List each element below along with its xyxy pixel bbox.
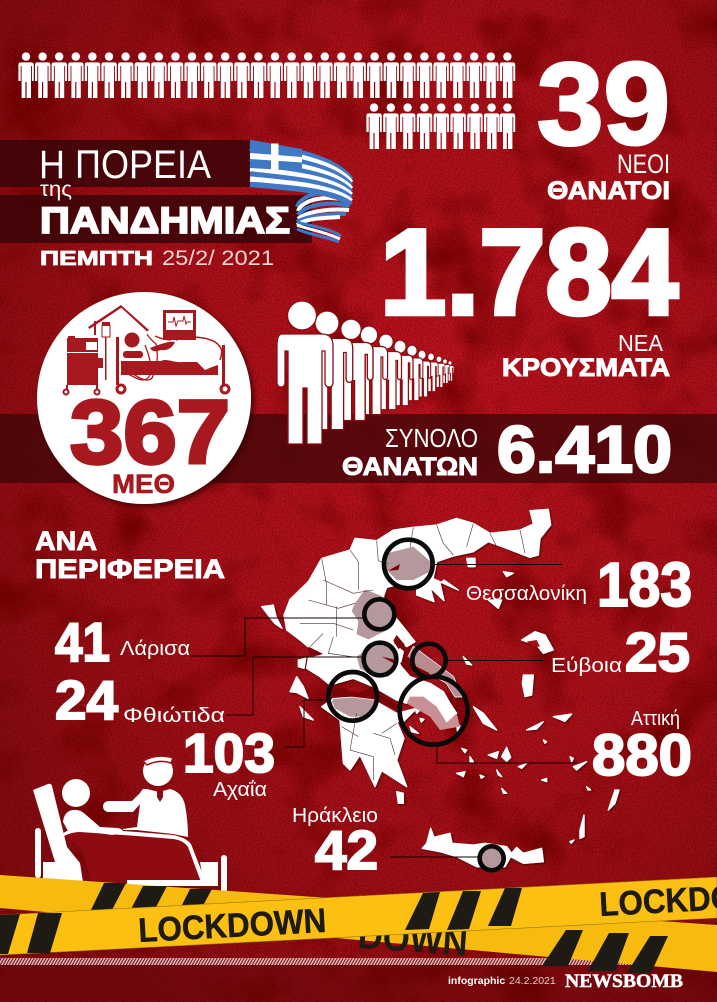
lockdown tape: front: LOCKDOWN — [137, 902, 327, 950]
title block: 25/2/ 2021 — [162, 247, 274, 270]
footer credits: 24.2.2021 — [509, 975, 556, 987]
number: 1.784 new cases: ΚΡΟΥΣΜΑΤΑ — [502, 354, 670, 382]
heading: by region — [35, 526, 225, 584]
regional figures: 41 — [55, 611, 110, 673]
lockdown tape: back: DOWN — [356, 915, 469, 965]
title block: ΠΑΝΔΗΜΙΑΣ — [40, 200, 290, 241]
map of Greece — [262, 509, 619, 870]
regional figures: Θεσσαλονίκη — [466, 583, 587, 605]
number: 1.784 new cases: 1.784 — [380, 204, 678, 340]
title block: της — [40, 178, 72, 201]
number: 39 new deaths: 39 — [537, 38, 670, 169]
title block: ΠΕΜΠΤΗ — [40, 248, 153, 270]
heading: by region: ΠΕΡΙΦΕΡΕΙΑ — [35, 554, 225, 584]
icon: ICU bed — [64, 305, 229, 394]
leader lines — [190, 564, 577, 857]
total deaths figures: ΣΥΝΟΛΟ — [385, 423, 478, 453]
regional figures: Εύβοια — [551, 655, 622, 677]
hatched strip — [0, 958, 640, 965]
illustration: patient and doctor — [33, 756, 227, 893]
regional figures: 880 — [592, 723, 692, 788]
regional figures: 25 — [625, 621, 690, 683]
number: 1.784 new cases: ΝΕΑ — [618, 330, 664, 356]
lockdown tape: front — [0, 876, 717, 955]
total deaths figures: ΘΑΝΑΤΩΝ — [342, 453, 478, 481]
footer credits: NEWSBOMB — [565, 971, 683, 992]
highlighted regions — [332, 547, 462, 730]
regional figures — [55, 551, 692, 881]
number: 39 new deaths: ΘΑΝΑΤΟΙ — [547, 177, 670, 205]
regional figures: 24 — [55, 669, 118, 731]
total deaths figures: 6.410 — [497, 412, 672, 486]
regional figures: Αχαΐα — [213, 779, 267, 801]
number: 367 ICU: 367 — [70, 383, 230, 483]
title block: Η ΠΟΡΕΙΑ — [39, 143, 211, 187]
regional figures: Ηράκλειο — [292, 805, 378, 827]
footer credits: infographic — [448, 975, 505, 987]
regional figures: 42 — [315, 819, 378, 881]
title block — [0, 140, 312, 270]
heading: by region: ΑΝΑ — [35, 526, 97, 556]
footer credits — [448, 971, 683, 992]
regional figures: Λάρισα — [120, 638, 190, 660]
regional figures: Αττική — [631, 708, 680, 730]
label: ΜΕΘ: ΜΕΘ — [112, 469, 175, 499]
dark band: total deaths — [0, 414, 717, 483]
gulf and region lines — [300, 523, 540, 780]
regional figures: 103 — [183, 722, 275, 784]
people queue — [277, 301, 454, 444]
people row: 39 deaths — [18, 52, 515, 149]
total deaths figures — [342, 412, 672, 486]
leader circles — [328, 540, 504, 870]
lockdown tape: back — [0, 875, 717, 973]
number: 39 new deaths: ΝΕΟΙ — [617, 149, 670, 179]
icon: Greek flag ribbon — [250, 140, 351, 242]
regional figures: 183 — [597, 551, 692, 620]
regional figures: Φθιώτιδα — [123, 705, 225, 727]
ICU circle panel — [37, 292, 251, 504]
